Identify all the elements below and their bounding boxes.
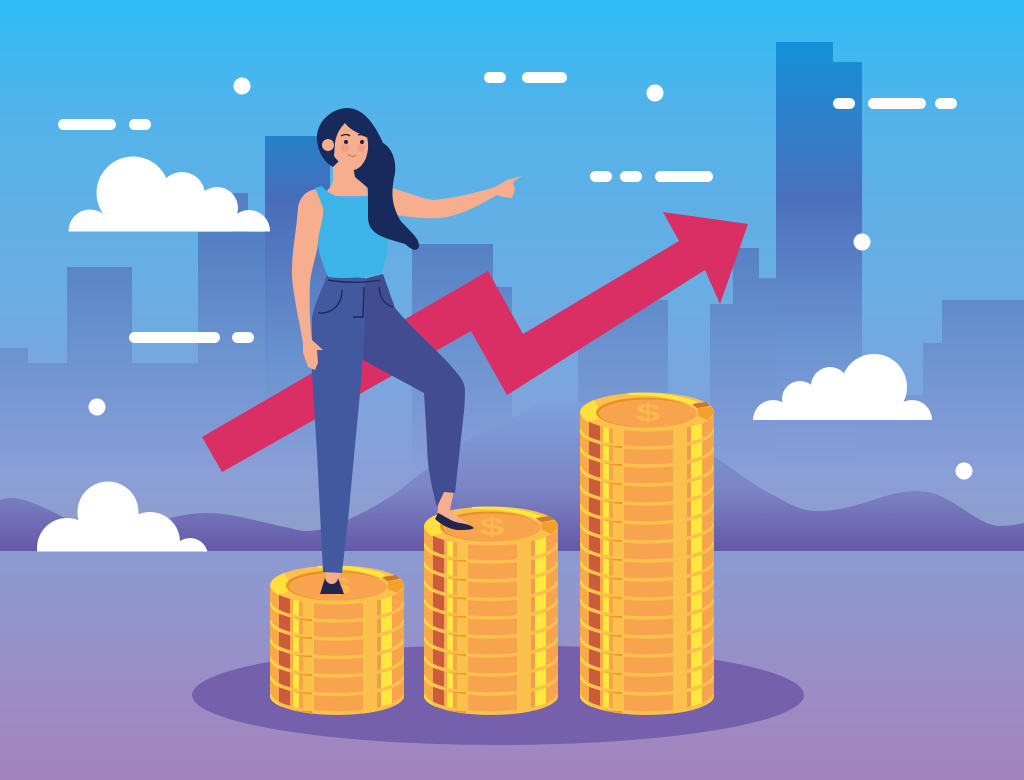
ground bbox=[0, 551, 1024, 780]
distant hills bbox=[0, 403, 1024, 551]
sky background bbox=[0, 0, 1024, 552]
city skyline bbox=[0, 42, 1024, 470]
coin stack: tall bbox=[580, 392, 714, 717]
coin stack: medium bbox=[424, 506, 558, 717]
white dashes bbox=[58, 72, 957, 343]
pointing arm bbox=[388, 176, 522, 218]
cloud: upper left bbox=[68, 156, 270, 232]
hair bbox=[317, 108, 419, 250]
woman pointing bbox=[292, 108, 522, 594]
stepping leg and shoe bbox=[360, 274, 474, 530]
pants detail bbox=[318, 280, 393, 317]
face bbox=[322, 123, 368, 170]
neck and chest bbox=[322, 155, 368, 196]
ground shadow ellipse bbox=[192, 645, 804, 745]
coin stack: small bbox=[270, 565, 404, 717]
standing side arm bbox=[292, 189, 323, 370]
red growth arrow bbox=[202, 212, 748, 472]
cloud: right bbox=[753, 354, 932, 420]
tank top bbox=[315, 186, 392, 278]
standing leg and shoe bbox=[312, 275, 365, 594]
cloud: lower left bbox=[37, 482, 208, 552]
white dots bbox=[88, 78, 972, 480]
